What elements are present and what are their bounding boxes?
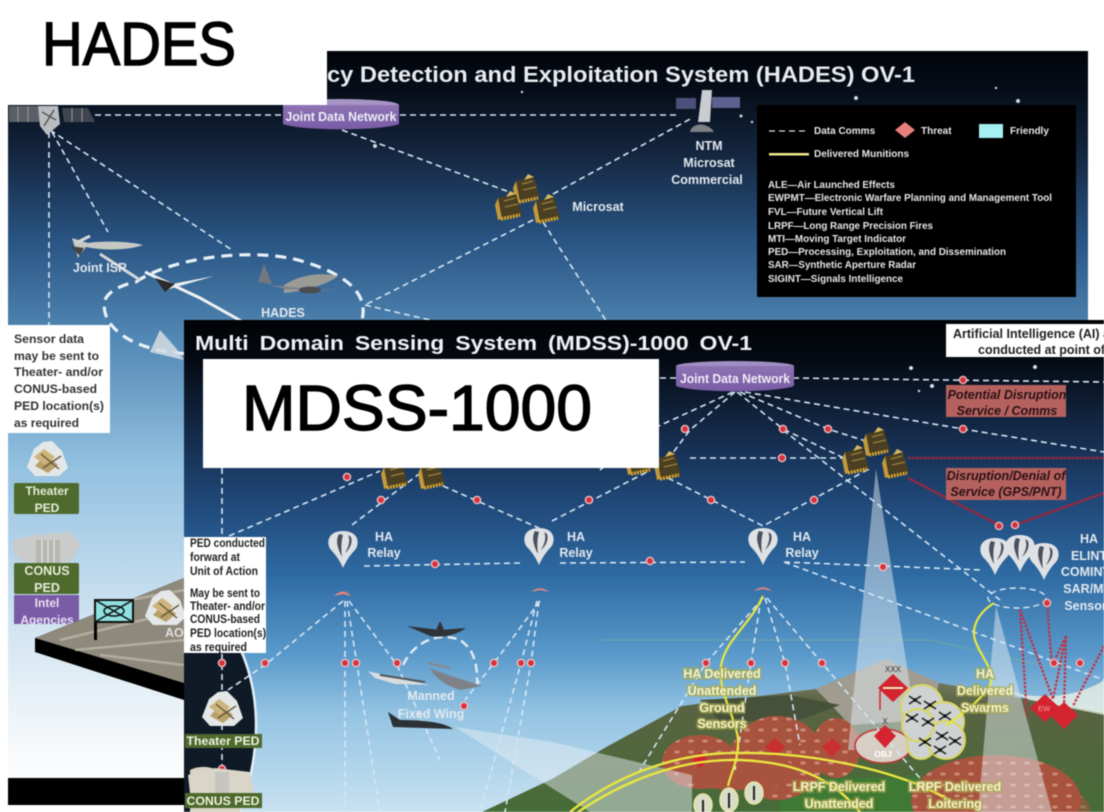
delivered munitions arcs xyxy=(570,596,994,812)
icon: lower manned aircraft xyxy=(150,330,184,360)
data comms links xyxy=(222,378,1104,812)
callout: sensor data note: CONUS-based xyxy=(14,382,97,396)
legend: acronyms: ALE—Air Launched Effects xyxy=(768,180,895,191)
threat symbol text: EW xyxy=(1038,704,1051,713)
legend: data comms: Data Comms xyxy=(814,126,876,137)
label: HA Delivered Swarms xyxy=(957,667,1013,715)
icon: unit flag xyxy=(94,600,133,640)
icon: NTM satellite xyxy=(676,90,740,132)
icons: microsat clusters xyxy=(381,427,909,489)
white mask behind HADES label xyxy=(0,0,327,105)
callout: Theater PED: Theater PED xyxy=(186,736,260,748)
callout: Theater PED xyxy=(14,483,79,515)
labels: HA Relay: HA xyxy=(793,530,811,544)
callout: sensor data note: Theater- and/or xyxy=(14,365,103,379)
legend: acronyms: MTI—Moving Target Indicator xyxy=(768,234,906,245)
label: HA ELINT COMINT SAR sensors xyxy=(1061,532,1104,613)
callout: PED conducted note xyxy=(184,537,266,654)
icons: small launched effects xyxy=(334,587,772,596)
icons: high-altitude balloons xyxy=(328,528,1059,580)
icon: Joint Data Network cylinder xyxy=(283,99,399,129)
label: LRPF Delivered Loitering xyxy=(909,780,1001,811)
callout: sensor data note: may be sent to xyxy=(14,349,99,363)
labels: HA Relay: HA xyxy=(567,530,585,544)
threat symbol text xyxy=(882,665,1051,726)
legend: threat: Threat xyxy=(921,126,952,137)
heading: MDSS-1000: MDSS-1000 xyxy=(242,372,592,444)
icons: manned aircraft xyxy=(368,621,482,729)
labels: HA Relay: Relay xyxy=(367,546,401,560)
threat ground footprint xyxy=(678,761,792,790)
callout: sensor data note: Sensor data xyxy=(14,332,84,346)
label: HA Delivered Unattended Ground Sensors: Unattended xyxy=(688,684,756,698)
terrain slab xyxy=(35,578,186,700)
data comms links xyxy=(49,115,692,355)
labels: HA Relay: Relay xyxy=(785,546,819,560)
label: NTM Microsat Commercial: NTM xyxy=(695,139,723,153)
callout: Disruption/Denial: Disruption/Denial of xyxy=(947,469,1067,483)
icon: Joint Data Network cylinder xyxy=(676,361,794,391)
icon: CONUS site xyxy=(188,768,254,793)
callout: CONUS PED: PED xyxy=(34,581,60,595)
callout: Potential Disruption: Potential Disruption xyxy=(948,388,1067,402)
callout: PED conducted note: Theater- and/or xyxy=(190,601,265,613)
label: Microsat: Microsat xyxy=(572,200,625,214)
label: HA Delivered Unattended Ground Sensors xyxy=(683,667,761,731)
label box: MDSS-1000 xyxy=(203,359,659,468)
label: HA Delivered Swarms: Delivered xyxy=(957,684,1013,698)
callout: PED conducted note: PED conducted xyxy=(190,538,265,550)
callout: PED conducted note: May be sent to xyxy=(190,588,260,600)
legend: friendly: Friendly xyxy=(1010,126,1049,137)
threat symbols xyxy=(692,674,1078,768)
label: HA Delivered Unattended Ground Sensors: Sensors xyxy=(697,717,747,731)
legend: acronyms: SIGINT—Signals Intelligence xyxy=(768,274,903,285)
heading: MDSS panel title: Multi Domain Sensing System (MDSS)-1000 OV-1 xyxy=(195,332,752,355)
callout: PED conducted note: as required xyxy=(190,642,247,654)
objective ellipse xyxy=(855,729,911,763)
earth limb xyxy=(184,640,256,812)
callout: CONUS PED: CONUS PED xyxy=(186,796,260,808)
callout: CONUS PED: CONUS xyxy=(24,564,70,578)
label: LRPF Delivered Loitering: Loitering xyxy=(928,797,982,811)
label: Joint ISR: Joint ISR xyxy=(73,261,127,275)
label: HA Delivered Swarms: HA xyxy=(976,667,994,681)
label: LRPF Delivered Unattended: LRPF Delivered xyxy=(793,780,885,794)
callout: Theater PED: PED xyxy=(35,501,60,515)
sensor beams xyxy=(455,469,1052,812)
stars in MDSS sky xyxy=(908,364,1038,393)
heading: HADES panel title: cy Detection and Exploitation System (HADES) OV-1 xyxy=(327,62,915,87)
labels: HA Relay: HA xyxy=(375,530,393,544)
callout: Intel Agencies: Agencies xyxy=(20,613,74,627)
icon: HADES drone xyxy=(145,272,243,322)
icon: Joint Data Network cylinder: Joint Data Network xyxy=(286,110,397,124)
legend: acronyms xyxy=(768,180,1052,285)
icon: HADES jet xyxy=(258,264,338,294)
icon: HADES satellite xyxy=(9,106,95,135)
label: NTM Microsat Commercial: Commercial xyxy=(671,173,743,187)
label: Manned Fixed Wing: Fixed Wing xyxy=(398,707,464,721)
callout: PED conducted note: forward at xyxy=(190,552,240,564)
terrain xyxy=(482,640,1104,812)
ground sensor icons xyxy=(694,782,763,812)
labels: HA Relay: Relay xyxy=(559,546,593,560)
legend: acronyms: EWPMT—Electronic Warfare Planning and Management Tool xyxy=(768,193,1052,204)
panel: legend xyxy=(757,105,1076,297)
callout: AI note: conducted at point of xyxy=(978,343,1104,357)
label: Manned Fixed Wing xyxy=(398,689,464,721)
callout: PED conducted note: CONUS-based xyxy=(190,614,260,626)
callout: Disruption/Denial xyxy=(946,468,1067,500)
legend: acronyms: SAR—Synthetic Aperture Radar xyxy=(768,260,916,271)
legend: acronyms: PED—Processing, Exploitation, and Dissemination xyxy=(768,247,1006,258)
friendly swarm cluster xyxy=(901,685,965,759)
icon: Joint ISR drone xyxy=(70,236,143,280)
threat domes xyxy=(662,716,1090,812)
icon: Joint Data Network cylinder: Joint Data Network xyxy=(680,372,790,386)
label: HADES aircraft: HADES xyxy=(261,306,305,320)
label: LRPF Delivered Unattended: Unattended xyxy=(805,797,873,811)
heading: HADES: HADES xyxy=(42,10,236,78)
icon: Theater PED site xyxy=(202,691,243,726)
callout: PED conducted note: Unit of Action xyxy=(190,566,258,578)
threat symbol text: X xyxy=(882,717,888,726)
callout: Theater PED: Theater xyxy=(25,484,69,498)
bottom black strip xyxy=(8,778,184,805)
label: LRPF Delivered Loitering: LRPF Delivered xyxy=(909,780,1001,794)
label: HA Delivered Unattended Ground Sensors: HA Delivered xyxy=(683,667,761,681)
icon: microsat cluster xyxy=(495,174,560,223)
legend: threat xyxy=(895,122,952,138)
legend: acronyms: LRPF—Long Range Precision Fires xyxy=(768,221,933,232)
label: NTM Microsat Commercial xyxy=(671,139,743,187)
legend: acronyms: FVL—Future Vertical Lift xyxy=(768,207,884,218)
legend: friendly xyxy=(979,124,1049,138)
panel: MDSS-1000 OV-1 diagram xyxy=(184,320,1104,812)
label: NTM Microsat Commercial: Microsat xyxy=(683,156,736,170)
callout: AI note xyxy=(946,324,1104,357)
stars in HADES sky xyxy=(373,87,1020,148)
legend: delivered munitions: Delivered Munitions xyxy=(814,149,909,160)
label: HA Delivered Swarms: Swarms xyxy=(961,701,1009,715)
callout: PED conducted note: PED location(s) xyxy=(190,628,266,640)
callout: CONUS PED xyxy=(14,563,79,595)
callout: Potential Disruption xyxy=(946,385,1067,418)
callout: Intel Agencies: Intel xyxy=(35,596,59,610)
callout: sensor data note: as required xyxy=(14,416,79,430)
legend: data comms xyxy=(768,126,876,135)
icon: CONUS map xyxy=(13,532,81,563)
label: HA Delivered Unattended Ground Sensors: Ground xyxy=(699,701,745,715)
threat symbol text: XXX xyxy=(885,665,902,674)
objective ellipse: OBJ xyxy=(874,749,892,759)
link markers xyxy=(218,376,1084,773)
callout: sensor data note: PED location(s) xyxy=(14,399,104,413)
callout: sensor data note xyxy=(8,325,110,433)
labels: HA Relay xyxy=(367,530,819,560)
disruption lines xyxy=(908,458,1104,716)
terrain slab: AO xyxy=(165,626,184,640)
label: LRPF Delivered Unattended xyxy=(793,780,885,811)
label: Manned Fixed Wing: Manned xyxy=(407,689,455,703)
callout: Potential Disruption: Service / Comms xyxy=(957,404,1057,418)
callout: Intel Agencies xyxy=(14,595,79,627)
label: HA ELINT COMINT SAR sensors: HA xyxy=(1080,532,1098,546)
callout: Disruption/Denial: Service (GPS/PNT) xyxy=(950,485,1062,499)
icon: Theater PED site xyxy=(27,441,68,476)
